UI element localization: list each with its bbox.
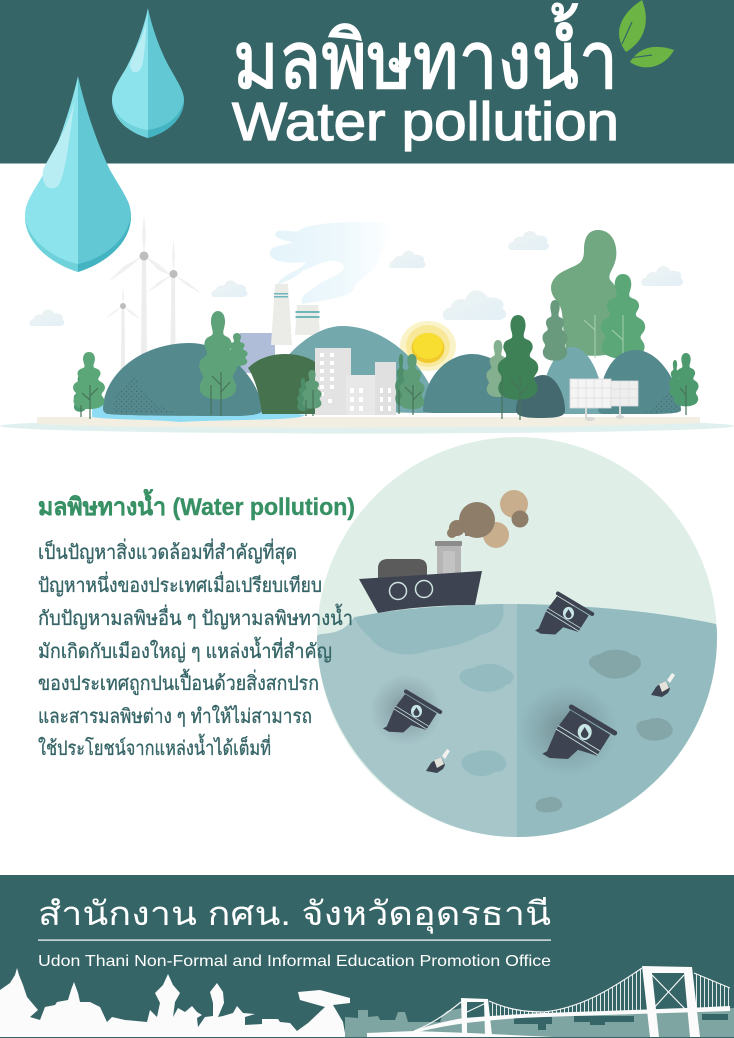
title: Thai: มลพิษทางน้ำ (233, 3, 618, 105)
water right half (517, 604, 717, 837)
sky (317, 437, 717, 837)
bridge deck (414, 1006, 730, 1033)
chimneys (240, 284, 320, 373)
bottle 2 (426, 749, 450, 773)
bottle 1 (651, 673, 675, 697)
tree trunks (81, 372, 686, 420)
footer band (0, 875, 734, 1038)
skyline silhouette: landmarks (0, 968, 350, 1037)
skyline silhouette: water under bridge (462, 1008, 734, 1037)
front trees (73, 311, 699, 412)
body text: และสารมลพิษต่าง ๆ ทำให้ไม่สามารถ (38, 705, 312, 728)
stain under ship (355, 604, 504, 654)
body text: ใช้ประโยชน์จากแหล่งน้ำได้เต็มที่ (38, 734, 271, 760)
water (92, 403, 305, 422)
small tower (461, 998, 492, 1035)
white shore (367, 1031, 553, 1037)
water left half (317, 604, 517, 837)
body text (38, 538, 353, 760)
hill: left large (103, 343, 262, 416)
skyline blocks under deck (514, 1014, 728, 1030)
icon: green leaves (619, 0, 674, 67)
footer English subtitle: Udon Thani Non-Formal and Informal Education Promotion Office (38, 953, 551, 970)
body text: มักเกิดกับเมืองใหญ่ ๆ แหล่งน้ำที่สำคัญ (38, 637, 332, 663)
circle illustration: polluted sea (317, 437, 717, 837)
back hills (262, 326, 436, 413)
hill: right (423, 354, 530, 413)
footer Thai title: สำนักงาน กศน. จังหวัดอุดรธานี (38, 895, 551, 934)
hill: far right (598, 350, 681, 414)
title: English: Water pollution (232, 92, 619, 152)
section heading: มลพิษทางน้ำ (Water pollution) (38, 488, 355, 521)
icon: small water drop (112, 8, 184, 138)
hill texture (112, 376, 178, 413)
ground (0, 418, 734, 434)
trees behind hills (542, 274, 645, 361)
oil clouds (460, 650, 673, 813)
barrel 3 (542, 707, 615, 759)
landscape illustration (0, 213, 734, 434)
big tree behind (551, 230, 623, 356)
skyline silhouette: city and water (345, 1008, 462, 1037)
city buildings (315, 348, 396, 415)
wind turbines (105, 213, 202, 372)
oil shadows (370, 674, 442, 746)
sun (400, 321, 456, 371)
bridge hangers (492, 970, 729, 1016)
factory smoke (270, 222, 390, 304)
solar panels (570, 379, 638, 421)
dark blob hill (516, 375, 565, 418)
body text: ปัญหาหนึ่งของประเทศเมื่อเปรียบเทียบ (38, 571, 322, 597)
big tower (642, 966, 700, 1037)
body text: ของประเทศถูกปนเปื้อนด้วยสิ่งสกปรก (38, 669, 319, 696)
barrel 1 (535, 593, 592, 635)
header band (0, 0, 734, 164)
body text: เป็นปัญหาสิ่งแวดล้อมที่สำคัญที่สุด (38, 538, 297, 565)
icon: large water drop (25, 76, 131, 272)
clouds (29, 231, 683, 326)
bridge cables (414, 968, 730, 1031)
body text: กับปัญหามลพิษอื่น ๆ ปัญหามลพิษทางน้ำ (38, 604, 353, 630)
bridge (367, 966, 734, 1037)
ship (359, 490, 528, 613)
hill: dark green (248, 354, 320, 414)
barrel 2 (383, 691, 440, 733)
